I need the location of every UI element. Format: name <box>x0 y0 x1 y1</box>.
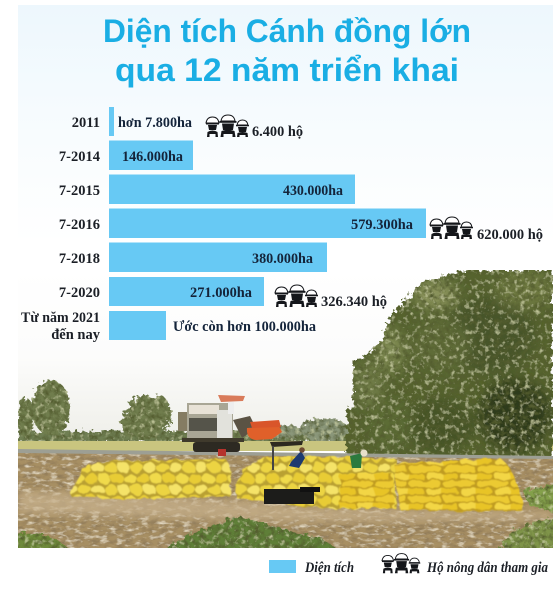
value: 7-2018: 380.000ha <box>252 251 314 267</box>
bar: 7-2014 <box>109 140 193 170</box>
value: 620.000 households: 620.000 hộ <box>477 227 543 243</box>
row label: from 2021: Từ năm 2021 <box>21 310 100 326</box>
left trees <box>18 380 171 439</box>
value: from 2021: Ước còn hơn 100.000ha <box>173 319 317 335</box>
title: Diện tích Cánh đồng lớn <box>103 13 471 49</box>
value: 326.340 households: 326.340 hộ <box>321 294 387 310</box>
value: 7-2014: 146.000ha <box>122 149 184 165</box>
row label: 7-2015: 7-2015 <box>59 183 100 199</box>
legend: area swatch <box>269 560 296 573</box>
title: qua 12 năm triển khai <box>115 52 459 88</box>
bar: 2011 <box>109 107 114 136</box>
row label: 7-2016: 7-2016 <box>59 217 100 233</box>
ground <box>18 452 553 548</box>
field strip <box>18 441 553 451</box>
grass <box>12 484 560 552</box>
rice sacks right pile <box>394 458 523 511</box>
path <box>18 491 553 522</box>
title <box>103 13 471 88</box>
row label: from 2021 <box>21 310 101 343</box>
value: 2011: hơn 7.800ha <box>118 115 193 131</box>
bar: 7-2020 <box>109 277 264 306</box>
harvester <box>178 395 282 456</box>
large tree mass on the right <box>340 265 555 460</box>
row label: from 2021: đến nay <box>51 327 101 343</box>
page background <box>18 5 553 270</box>
sack stack centre <box>340 474 394 508</box>
rice bags mid pile <box>236 457 396 509</box>
bar: from 2021 <box>109 311 166 340</box>
road <box>18 449 553 459</box>
row label: 2011: 2011 <box>72 115 100 131</box>
value: 7-2020: 271.000ha <box>190 285 253 301</box>
row label: 7-2014: 7-2014 <box>59 149 100 165</box>
value: 7-2016: 579.300ha <box>351 217 414 233</box>
distant tree line <box>18 418 358 442</box>
legend: area label: Diện tích <box>304 560 354 576</box>
icon: legend farmers <box>382 554 420 573</box>
bar: 7-2016 <box>109 208 426 238</box>
rice bags left pile <box>70 459 231 499</box>
bar: 7-2018 <box>109 242 327 272</box>
tractor with workers <box>264 441 368 504</box>
value: 6.400 households: 6.400 hộ <box>252 124 303 140</box>
icon: farmers 2020 <box>275 285 318 307</box>
bar: 7-2015 <box>109 174 355 204</box>
value: 7-2015: 430.000ha <box>283 183 344 199</box>
icon: farmers 2011 <box>206 115 249 137</box>
row label: 7-2018: 7-2018 <box>59 251 100 267</box>
icon: farmers 2016 <box>430 217 473 239</box>
row label: 7-2020: 7-2020 <box>59 285 100 301</box>
photo: rice harvest field <box>12 265 560 552</box>
